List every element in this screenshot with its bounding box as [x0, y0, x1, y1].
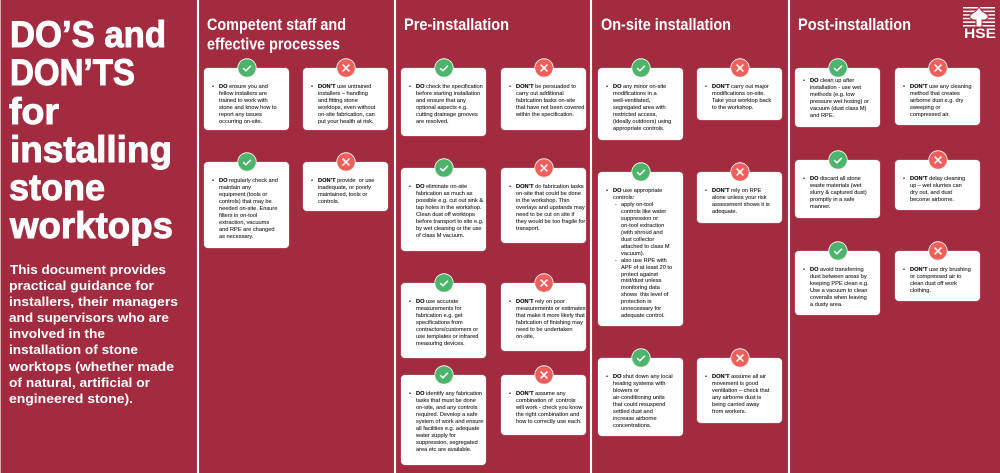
card: do ensure installers trained — [204, 58, 290, 130]
icon: HSE logo — [963, 7, 996, 41]
card: do use appropriate controls — [598, 162, 684, 326]
card: do identify fabrication tasks: DO identify any fabrication tasks that must be done on-site, and any controls required. Develop a safe system of work and ensure all facilities e.g. adequate water supply for suppression, segregated area etc are available. — [416, 391, 483, 453]
card: do use appropriate controls: also use RPE with APF of at least 20 to protect against mist/dust unless monitoring data shows this level of protection is unnecessary for adequate control. — [621, 258, 672, 319]
introduction text — [8, 263, 178, 406]
card: do check and maintain equipment: DO regularly check and maintain any equipment (tools or controls) that may be needed on-site. Ensure filters in on-tool extraction, vacuums and RPE are changed as necessary. — [219, 178, 278, 240]
card: don't assume air movement is good ventilation — [696, 348, 782, 424]
card: don't assume air movement is good ventilation: DON’T assume all air movement is good ventilation – check that any airborne dust is being carried away from workers. — [712, 374, 769, 415]
card: do avoid transferring dust: DO avoid transferring dust between areas by keeping PPE clean e.g. Use a vacuum to clean coveralls when leaving a dusty area. — [810, 267, 869, 308]
card: do eliminate on-site fabrication: DO eliminate on-site fabrication as much as possible e.g. cut out sink & tap holes in the workshop. Clean dust off worktops before transport to site e.g. by wet cleaning or the use of class M vacuum. — [416, 184, 483, 239]
title — [9, 13, 173, 246]
card: don't provide inadequate tools: DON’T provide or use inadequate, or poorly maintained, tools or controls. — [318, 178, 374, 205]
card: don't assume any combination of controls — [500, 365, 586, 436]
card: don't carry out additional fabrication — [500, 58, 586, 130]
card: don't use untrained installers: DON’T use untrained installers – handling and fitting stone worktops, even without on-site fabrication, can put your health at risk. — [318, 84, 375, 125]
card: do discard stone waste — [794, 150, 880, 218]
card: do check the specification: DO check the specification before starting installation and ensure that any optional aspects e.g. cutting drainage grooves are resolved. — [416, 84, 483, 125]
card: don't use dry brushing: DON’T use dry brushing or compressed air to clean dust off work clothing. — [910, 267, 971, 294]
card: don't use untrained installers — [302, 58, 388, 130]
card: do identify fabrication tasks — [400, 365, 486, 466]
card: don't carry out major modifications: DON’T carry out major modifications on-site. Take your worktop back to the workshop. — [712, 84, 771, 111]
panel: title and introduction — [8, 13, 178, 406]
card: do use accurate measurements — [400, 273, 486, 358]
introduction text: worktops (whether made — [8, 360, 174, 374]
card: do minor modifications in ventilated area: DO any minor on-site modifications in a well-ventilated, segregated area with restricted access, (ideally outdoors) using appropriate controls. — [613, 84, 671, 132]
card: do minor modifications in ventilated area — [598, 58, 684, 140]
card: don't assume any combination of controls: DON’T assume any combination of controls will work - check you know the right combination and how to correctly use each. — [516, 391, 582, 425]
title: installing — [10, 128, 172, 170]
card: don't rely on poor measurements: DON’T rely on poor measurements or estimates that make it more likely that fabrication of finishing may need to be undertaken on-site. — [516, 299, 586, 340]
card: don't use dry brushing — [894, 241, 980, 302]
introduction text: and supervisors who are — [9, 311, 169, 325]
title: DON’TS — [10, 51, 135, 93]
card: do clean up after installation: DO clean up after installation - use wet methods (e.g. low pressure wet hosing) or vacuum (dust class M) and RPE. — [810, 78, 869, 119]
card: do shut down local heating — [598, 348, 684, 436]
heading: Competent staff and effective processes: Competent staff and — [207, 16, 346, 34]
heading: Competent staff and effective processes: effective processes — [207, 36, 340, 54]
introduction text: involved in the — [9, 327, 105, 341]
card: don't use cleaning that creates airborne dust: DON’T use any cleaning method that creates airborne dust e.g. dry sweeping or compressed air. — [910, 84, 971, 118]
card: don't use cleaning that creates airborne dust — [894, 58, 980, 126]
introduction text: This document provides — [10, 263, 166, 277]
card: do use accurate measurements: DO use accurate measurements for fabrication e.g. get specifications from contractors/customers or use templates or infrared measuring devices. — [416, 299, 478, 347]
introduction text: installation of stone — [9, 343, 138, 357]
card: do eliminate on-site fabrication — [400, 158, 486, 252]
card: don't delay cleaning up — [894, 150, 980, 210]
introduction text: of natural, artificial or — [9, 376, 150, 390]
icon: HSE logo: HSE — [964, 26, 996, 41]
card: do check the specification — [400, 58, 486, 136]
title: stone — [9, 166, 105, 208]
card: don't do fabrication on-site: DON’T do fabrication tasks on-site that could be done in the workshop. Thin overlays and upstands may need to be cut on site if they would be too fragile for transport. — [516, 184, 585, 232]
heading: Competent staff and effective processes — [207, 16, 346, 54]
card: don't rely on RPE alone: DON’T rely on RPE alone unless your risk assessment shows it is adequate. — [712, 188, 770, 215]
card: don't rely on poor measurements — [500, 273, 586, 352]
card: do ensure installers trained: DO ensure you and fellow installers are trained to work with stone and know how to report any issues occurring on-site. — [219, 84, 277, 125]
card: do discard stone waste: DO discard all stone waste materials (wet slurry & captured dust) promptly in a safe manner. — [810, 176, 867, 210]
title: for — [9, 90, 59, 132]
card: don't carry out major modifications — [696, 58, 782, 120]
card: don't delay cleaning up: DON’T delay cleaning up – wet slurries can dry out, and dust become airborne. — [910, 176, 965, 203]
card: do clean up after installation — [794, 58, 880, 128]
introduction text: practical guidance for — [9, 279, 154, 293]
title: worktops — [9, 204, 173, 246]
card: don't provide inadequate tools — [302, 152, 388, 212]
card: don't rely on RPE alone — [696, 162, 782, 224]
introduction text: installers, their managers — [9, 295, 178, 309]
title: DO’S and — [10, 13, 166, 55]
introduction text: engineered stone). — [9, 392, 133, 406]
card: don't carry out additional fabrication: DON’T be persuaded to carry out additional fabrication tasks on-site that have not been covered within the specification. — [516, 84, 584, 118]
card: don't do fabrication on-site — [500, 158, 586, 244]
card: do use appropriate controls: DO use appropriate controls: — [613, 188, 662, 201]
heading: Pre-installation: Pre-installation — [404, 16, 509, 34]
card: do shut down local heating: DO shut down any local heating systems with blowers or air-conditioning units that could resuspend settled dust and increase airborne concentrations. — [613, 374, 673, 429]
card: do use appropriate controls: apply on-tool controls like water suppression or on-tool extraction (with shroud and dust collector attached to class M vacuum). — [621, 202, 670, 257]
heading: Post-installation: Post-installation — [798, 16, 911, 34]
card: do avoid transferring dust — [794, 241, 880, 316]
card: do check and maintain equipment — [204, 152, 290, 248]
heading: On-site installation: On-site installation — [601, 16, 731, 34]
